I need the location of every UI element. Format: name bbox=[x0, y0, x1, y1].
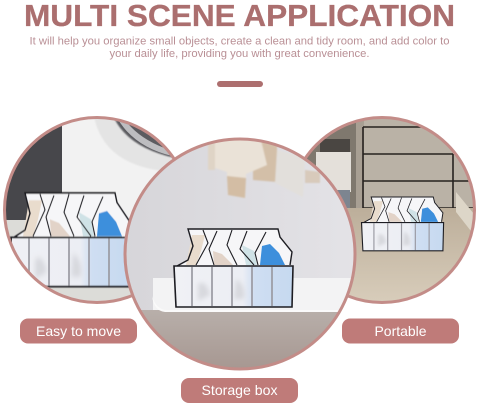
description text bbox=[30, 36, 450, 60]
description text: It will help you organize small objects, create a clean and tidy room, and add color to bbox=[30, 36, 450, 48]
label: easy to move: Easy to move bbox=[36, 324, 121, 339]
table bbox=[153, 278, 360, 311]
label: storage box bbox=[181, 378, 298, 403]
hanging clothes bbox=[208, 136, 320, 198]
photo circle: portable bbox=[304, 116, 476, 304]
photo circle: storage box bbox=[120, 135, 360, 375]
laundry basket bbox=[316, 152, 351, 192]
label: portable bbox=[342, 318, 459, 344]
description text: your daily life, providing you with great convenience. bbox=[110, 48, 370, 60]
label: portable: Portable bbox=[374, 324, 426, 339]
title: MULTI SCENE APPLICATION bbox=[24, 0, 455, 33]
label: easy to move bbox=[20, 318, 137, 344]
divider bar bbox=[217, 81, 263, 87]
label: storage box: Storage box bbox=[202, 383, 278, 398]
photo circle: easy to move bbox=[3, 116, 175, 304]
